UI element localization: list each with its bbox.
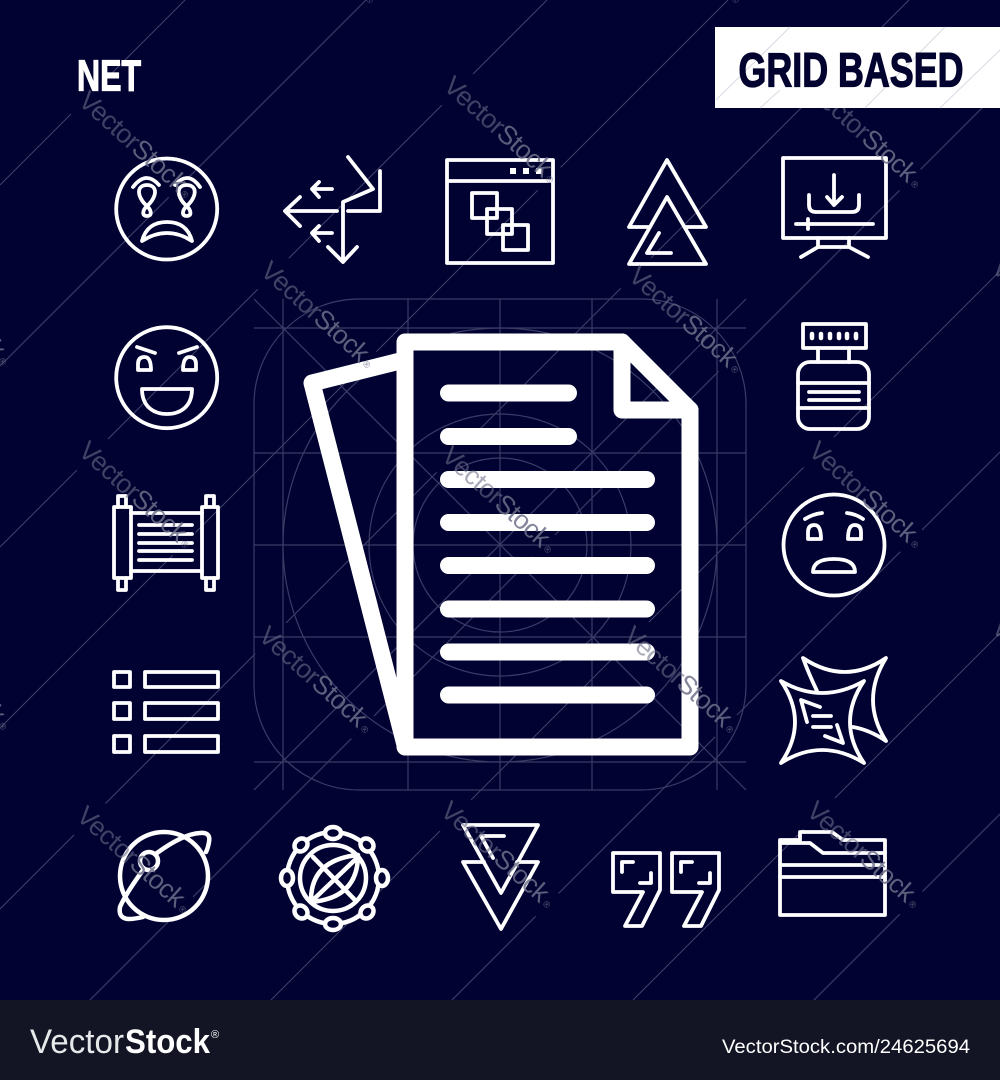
- footer bar: VectorStock.com/24625694: [722, 1037, 970, 1058]
- footer bar: Stock: [125, 1023, 210, 1061]
- icon: angry laughing face: [116, 327, 217, 428]
- icon: browser window with squares: [447, 160, 553, 263]
- icon: four-point stars: [781, 658, 886, 763]
- icon: quotation marks: [613, 853, 719, 926]
- central icon: documents: [312, 342, 690, 747]
- footer bar: Vector: [30, 1023, 124, 1061]
- icon: list: [114, 672, 218, 752]
- icon: arrows: [285, 157, 380, 262]
- icon: monitor download: [783, 158, 886, 257]
- icon: globe network: [281, 827, 388, 930]
- icon: scroll: [114, 496, 218, 590]
- icon: bottle: [798, 324, 869, 429]
- icon: worried face: [784, 494, 884, 596]
- footer bar: [0, 1000, 1000, 1080]
- icon: folder: [780, 832, 885, 915]
- watermark gaps: [71, 70, 931, 919]
- title: NET: NET: [77, 52, 141, 100]
- icon: triangles up: [629, 160, 706, 264]
- construction grid behind central icon: [254, 299, 746, 790]
- icon: crying face: [116, 158, 217, 260]
- badge: GRID BASED: [715, 27, 1000, 108]
- icon: planet: [120, 832, 209, 920]
- footer bar: ®: [211, 1029, 219, 1041]
- icon: triangles down: [463, 825, 538, 929]
